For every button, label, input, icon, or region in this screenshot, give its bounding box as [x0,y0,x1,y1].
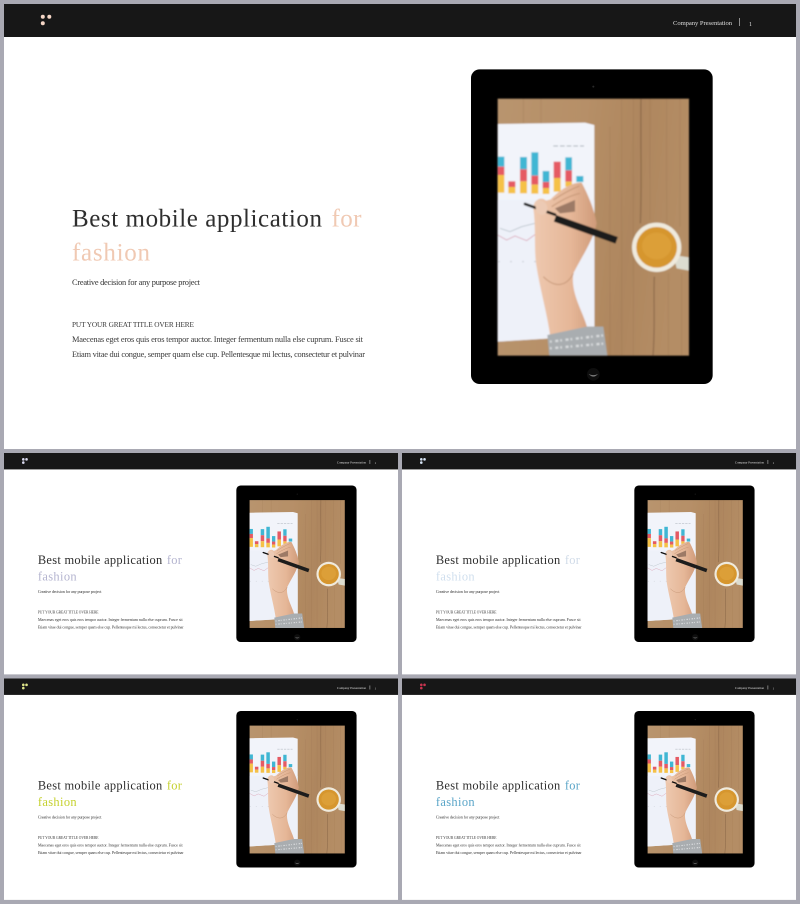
subtitle: Creative decision for any purpose project [38,589,102,594]
title [72,206,362,267]
header label [735,460,775,465]
body text: PUT YOUR GREAT TITLE OVER HERE [38,836,99,840]
title: for [332,206,362,233]
body text [436,611,582,631]
subtitle: Creative decision for any purpose project [72,278,201,287]
body text [72,320,365,359]
icon: logo dots [41,15,51,25]
icon: logo dots [420,458,426,464]
header label: Company Presentation [735,686,765,690]
body text [436,836,582,856]
panel: small slide (blue) [402,678,796,900]
title: Best mobile application [72,206,322,233]
title: fashion [38,570,77,584]
body text [38,836,184,856]
header bar [4,678,398,695]
body text: PUT YOUR GREAT TITLE OVER HERE [436,611,497,615]
body text [38,611,184,631]
tablet with photo [236,711,357,868]
title: for [565,778,581,792]
subtitle: Creative decision for any purpose project [38,814,102,819]
header label: Company Presentation [337,460,367,464]
header label [337,460,377,465]
title: for [565,553,581,567]
body text: PUT YOUR GREAT TITLE OVER HERE [38,611,99,615]
header label [673,18,752,28]
body text: PUT YOUR GREAT TITLE OVER HERE [72,320,195,329]
title: for [167,778,183,792]
body text: Maecenas eget eros quis eros tempor auctor. Integer fermentum nulla else cuprum. Fusce sit [38,843,183,848]
panel: large slide (peach) [4,4,796,449]
title [38,778,183,809]
title: fashion [72,240,150,267]
header label: Company Presentation [337,686,367,690]
icon: logo dots [420,684,426,689]
panel: small slide (lime) [4,678,398,900]
header label: Company Presentation [673,20,733,27]
icon: logo dots [22,458,28,464]
title: fashion [436,795,475,809]
body text: Maecenas eget eros quis eros tempor auctor. Integer fermentum nulla else cuprum. Fusce sit [72,335,364,344]
body text: Etiam vitae dui congue, semper quam else cup. Pellentesque mi lectus, consectetur et pulvinar [436,850,582,856]
tablet with photo [471,69,713,384]
body text: Maecenas eget eros quis eros tempor auctor. Integer fermentum nulla else cuprum. Fusce sit [436,843,581,848]
title [38,553,183,584]
title: Best mobile application [38,553,163,567]
header label: Company Presentation [735,460,765,464]
panel: small slide (lavender) [4,453,398,674]
body text: Maecenas eget eros quis eros tempor auctor. Integer fermentum nulla else cuprum. Fusce sit [436,617,581,622]
title: fashion [38,795,77,809]
title: Best mobile application [436,778,561,792]
body text: Etiam vitae dui congue, semper quam else cup. Pellentesque mi lectus, consectetur et pulvinar [72,350,365,359]
subtitle: Creative decision for any purpose project [436,589,500,594]
title: Best mobile application [436,553,561,567]
header label: 1 [773,461,775,465]
title [436,553,581,584]
title [436,778,581,809]
body text: Etiam vitae dui congue, semper quam else cup. Pellentesque mi lectus, consectetur et pulvinar [38,850,184,856]
icon: logo dots [22,684,28,689]
title: fashion [436,570,475,584]
header label: 1 [375,461,377,465]
header bar [4,4,796,37]
body text: Etiam vitae dui congue, semper quam else cup. Pellentesque mi lectus, consectetur et pulvinar [38,625,184,631]
body text: Maecenas eget eros quis eros tempor auctor. Integer fermentum nulla else cuprum. Fusce sit [38,617,183,622]
header label: 1 [375,686,377,690]
title: Best mobile application [38,778,163,792]
header label [735,685,775,690]
subtitle: Creative decision for any purpose project [436,814,500,819]
tablet with photo [634,486,755,642]
body text: PUT YOUR GREAT TITLE OVER HERE [436,836,497,840]
body text: Etiam vitae dui congue, semper quam else cup. Pellentesque mi lectus, consectetur et pulvinar [436,625,582,631]
tablet with photo [236,486,357,642]
title: for [167,553,183,567]
header bar [402,678,796,695]
header bar [4,453,398,469]
header label [337,685,377,690]
header bar [402,453,796,469]
tablet with photo [634,711,755,868]
header label: 1 [749,22,752,28]
header label: 1 [773,686,775,690]
panel: small slide (pale blue) [402,453,796,674]
